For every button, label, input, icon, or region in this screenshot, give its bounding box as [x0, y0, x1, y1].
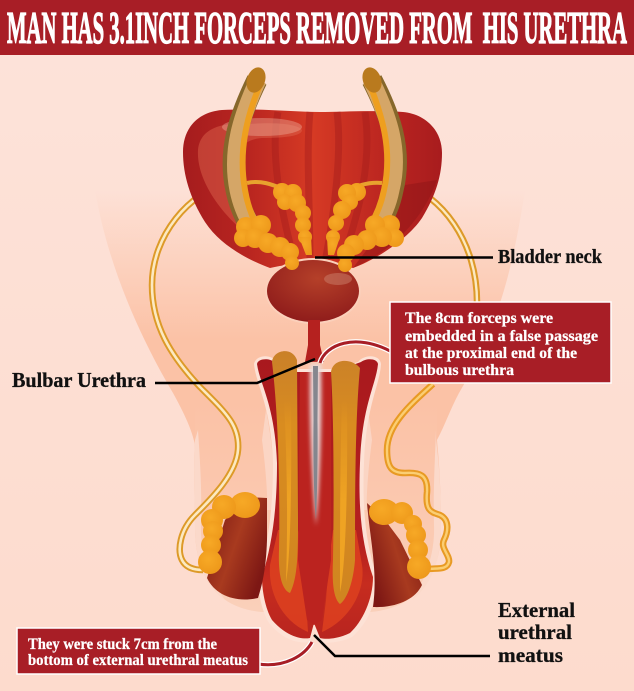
bladder muscle stripes	[275, 112, 367, 262]
callout: forceps: embedded in a false passage	[405, 328, 598, 345]
label: external urethral meatus: meatus	[498, 643, 563, 667]
title banner	[0, 0, 634, 55]
bladder dark lower edge	[353, 180, 437, 268]
urethra stalk	[305, 320, 324, 362]
left inner gland	[273, 183, 312, 255]
label: bulbar urethra: Bulbar Urethra	[12, 368, 146, 392]
label: external urethral meatus: urethral	[498, 620, 572, 644]
bladder	[183, 109, 442, 268]
right orange column	[331, 361, 360, 604]
right inner gland	[326, 183, 366, 255]
leader: bulbar urethra	[155, 359, 315, 383]
callout connector: meatus	[258, 642, 312, 665]
left epididymis	[198, 492, 260, 574]
shaft halo	[254, 356, 381, 643]
left orange column	[272, 351, 298, 593]
callout: forceps	[390, 302, 611, 383]
left column streak	[284, 400, 291, 582]
shaft	[257, 351, 378, 639]
scrotum	[194, 400, 441, 612]
leader: bladder neck	[315, 256, 493, 259]
urethra centre channel	[298, 372, 331, 625]
callout connector red line	[258, 642, 312, 665]
leader: external urethral meatus	[314, 635, 490, 656]
callout: forceps: at the proximal end of the	[405, 345, 577, 362]
left vas tube	[233, 65, 269, 226]
right vas tube	[359, 65, 396, 226]
callout: meatus	[17, 628, 260, 674]
callout: forceps: bulbous urethra	[405, 362, 514, 379]
right testis	[367, 499, 431, 607]
callout: meatus: bottom of external urethral meatus	[28, 652, 248, 669]
right epididymis	[369, 499, 431, 579]
callout connector: forceps	[320, 342, 392, 363]
callout connector red line	[320, 342, 392, 363]
callout: forceps: The 8cm forceps were	[405, 310, 553, 327]
label: external urethral meatus: External	[498, 598, 575, 622]
right outer gland	[337, 215, 404, 272]
glans left lobe	[270, 530, 308, 632]
right column streak	[340, 400, 347, 592]
body shading	[95, 190, 525, 530]
left cord	[152, 183, 238, 570]
left testis	[198, 492, 267, 599]
left outer gland	[234, 215, 299, 270]
inner ducts to glands	[247, 182, 382, 191]
seminal glands	[234, 183, 404, 272]
forceps	[313, 366, 318, 520]
forceps glow	[310, 364, 321, 526]
prostate	[265, 258, 361, 324]
bladder top shine	[222, 118, 302, 136]
right cord	[387, 183, 477, 569]
label: external urethral meatus	[498, 598, 575, 667]
label: bladder neck: Bladder neck	[498, 246, 603, 268]
callout: meatus: They were stuck 7cm from the	[28, 636, 217, 653]
bladder highlight	[198, 123, 302, 245]
glans right lobe	[322, 530, 363, 632]
